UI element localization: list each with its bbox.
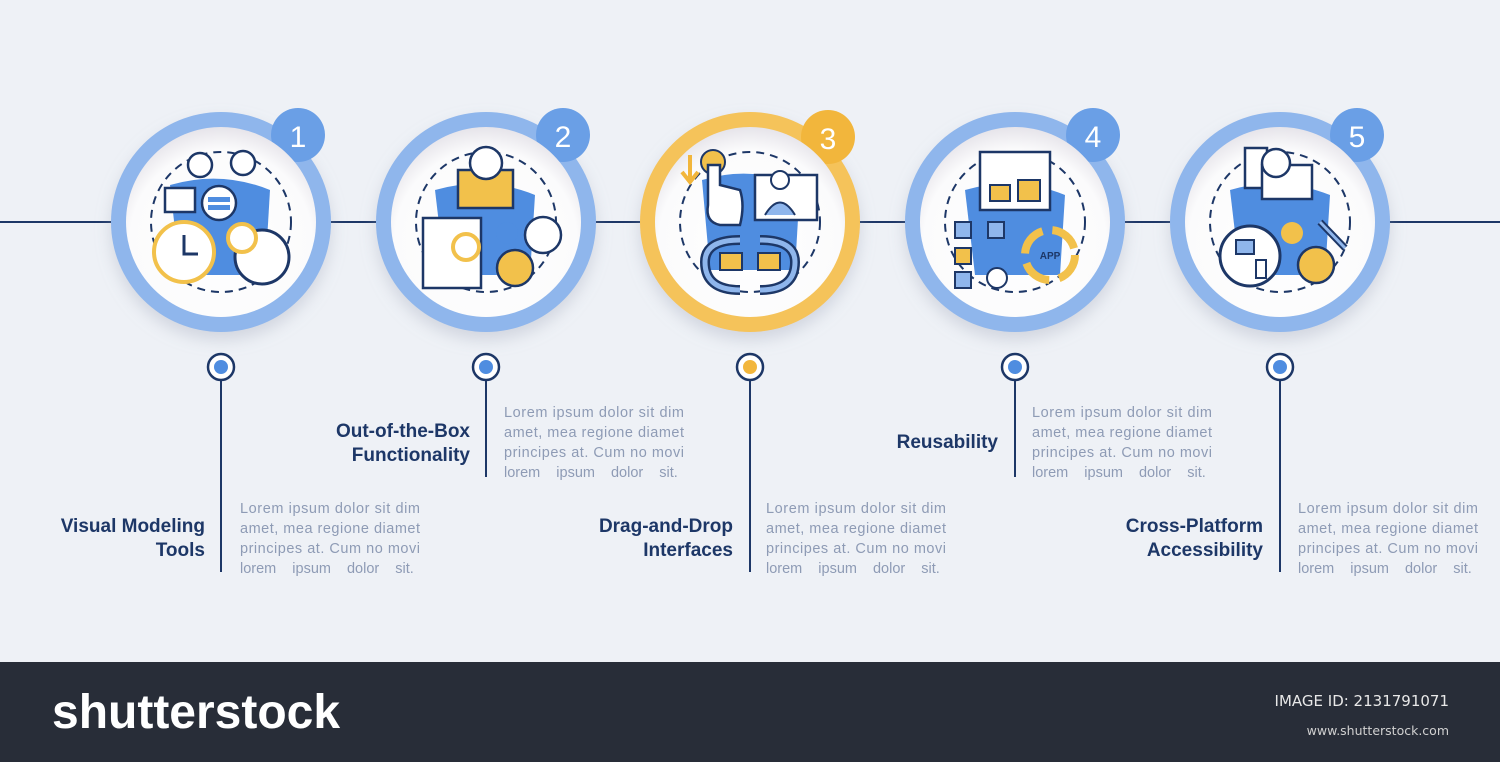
icon: visual modeling (151, 151, 291, 292)
step 3 circle (640, 110, 860, 332)
step 4 title: Reusability (897, 432, 998, 453)
step 3 body: amet, mea regione diamet (766, 521, 946, 537)
step 1 body: Lorem ipsum dolor sit dim (240, 501, 420, 517)
step 1 body (240, 501, 420, 577)
step 4 node (1002, 354, 1028, 380)
step 3 body (766, 501, 946, 577)
step 3 title: Drag-and-Drop (599, 516, 733, 537)
step 2 body (504, 405, 684, 481)
step 2 circle: 2 (555, 121, 571, 154)
step 5 node (1267, 354, 1293, 380)
step 1 title: Tools (156, 540, 205, 561)
step 5 body: Lorem ipsum dolor sit dim (1298, 501, 1478, 517)
step 1 body: principes at. Cum no movi (240, 541, 420, 557)
step 2 circle (376, 108, 596, 332)
step 3 title: Interfaces (643, 540, 733, 561)
step 3 circle: 3 (820, 123, 836, 156)
step 1 circle: 1 (290, 121, 306, 154)
step 4 body (1032, 405, 1212, 481)
step 1 body: lorem ipsum dolor sit. (240, 561, 414, 577)
step 3 body: lorem ipsum dolor sit. (766, 561, 940, 577)
step 2 title: Out-of-the-Box (336, 421, 470, 442)
step 4 body: lorem ipsum dolor sit. (1032, 465, 1206, 481)
icon: drag and drop (680, 150, 820, 292)
step 2 node (473, 354, 499, 380)
step 5 circle: 5 (1349, 121, 1365, 154)
timeline line (0, 221, 1500, 223)
step 5 circle (1170, 108, 1390, 332)
step 3 body: Lorem ipsum dolor sit dim (766, 501, 946, 517)
step 3 body: principes at. Cum no movi (766, 541, 946, 557)
step 2 title: Functionality (352, 445, 470, 466)
step 4 body: principes at. Cum no movi (1032, 445, 1212, 461)
icon: reusability (945, 152, 1085, 292)
step 1 title: Visual Modeling (61, 516, 205, 537)
step 3 node (737, 354, 763, 380)
step 1 circle (111, 108, 331, 332)
step 5 body (1298, 501, 1478, 577)
icon: cross-platform (1210, 148, 1350, 292)
footer image id: IMAGE ID: 2131791071 (1275, 692, 1449, 710)
footer bar (0, 662, 1500, 762)
step 4 body: Lorem ipsum dolor sit dim (1032, 405, 1212, 421)
step 4 body: amet, mea regione diamet (1032, 425, 1212, 441)
step 5 body: principes at. Cum no movi (1298, 541, 1478, 557)
footer url: www.shutterstock.com (1307, 723, 1449, 738)
footer logo: shutterstock (52, 686, 340, 739)
step 4 circle (905, 108, 1125, 332)
step 4 circle: 4 (1085, 121, 1101, 154)
icon: reusability: APP (1040, 251, 1061, 262)
step 1 body: amet, mea regione diamet (240, 521, 420, 537)
step 1 node (208, 354, 234, 380)
step 2 body: Lorem ipsum dolor sit dim (504, 405, 684, 421)
step 5 title: Accessibility (1147, 540, 1263, 561)
step 2 body: lorem ipsum dolor sit. (504, 465, 678, 481)
step 5 body: lorem ipsum dolor sit. (1298, 561, 1472, 577)
step 2 body: amet, mea regione diamet (504, 425, 684, 441)
step 2 body: principes at. Cum no movi (504, 445, 684, 461)
icon: out of the box (416, 147, 561, 292)
step 5 title: Cross-Platform (1126, 516, 1263, 537)
step 5 body: amet, mea regione diamet (1298, 521, 1478, 537)
